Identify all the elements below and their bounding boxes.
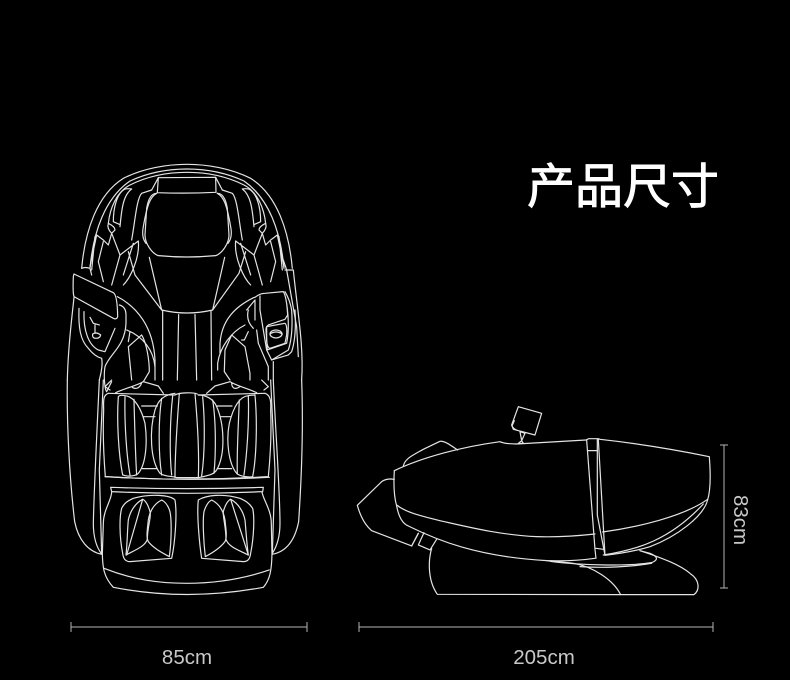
remote control	[512, 407, 542, 443]
side view of massage chair	[357, 407, 710, 595]
title: 产品尺寸	[527, 161, 719, 214]
head cushion	[403, 441, 458, 466]
dimension: width 85cm: 85cm	[162, 646, 212, 669]
centre back	[128, 252, 246, 380]
front view of massage chair	[67, 164, 302, 594]
foot rest	[357, 479, 437, 550]
right canopy loops and wing	[235, 189, 284, 285]
left canopy loops and wing	[82, 189, 139, 285]
canopy arcs	[82, 164, 292, 268]
dimension: height 83cm: 83cm	[729, 495, 752, 545]
main body	[394, 439, 710, 561]
dimension: width 85cm	[71, 622, 307, 669]
right control panel	[218, 260, 302, 380]
dimension: depth 205cm: 205cm	[513, 646, 575, 669]
dimension: depth 205cm	[359, 622, 713, 669]
dimension: height 83cm	[720, 445, 752, 588]
left armrest tablet and joystick	[67, 274, 155, 392]
upper chair: canopy, headrest and armrests	[67, 164, 302, 392]
lower chair: leg rest and foot massagers	[67, 380, 302, 594]
base	[429, 504, 703, 595]
headrest	[132, 177, 242, 257]
